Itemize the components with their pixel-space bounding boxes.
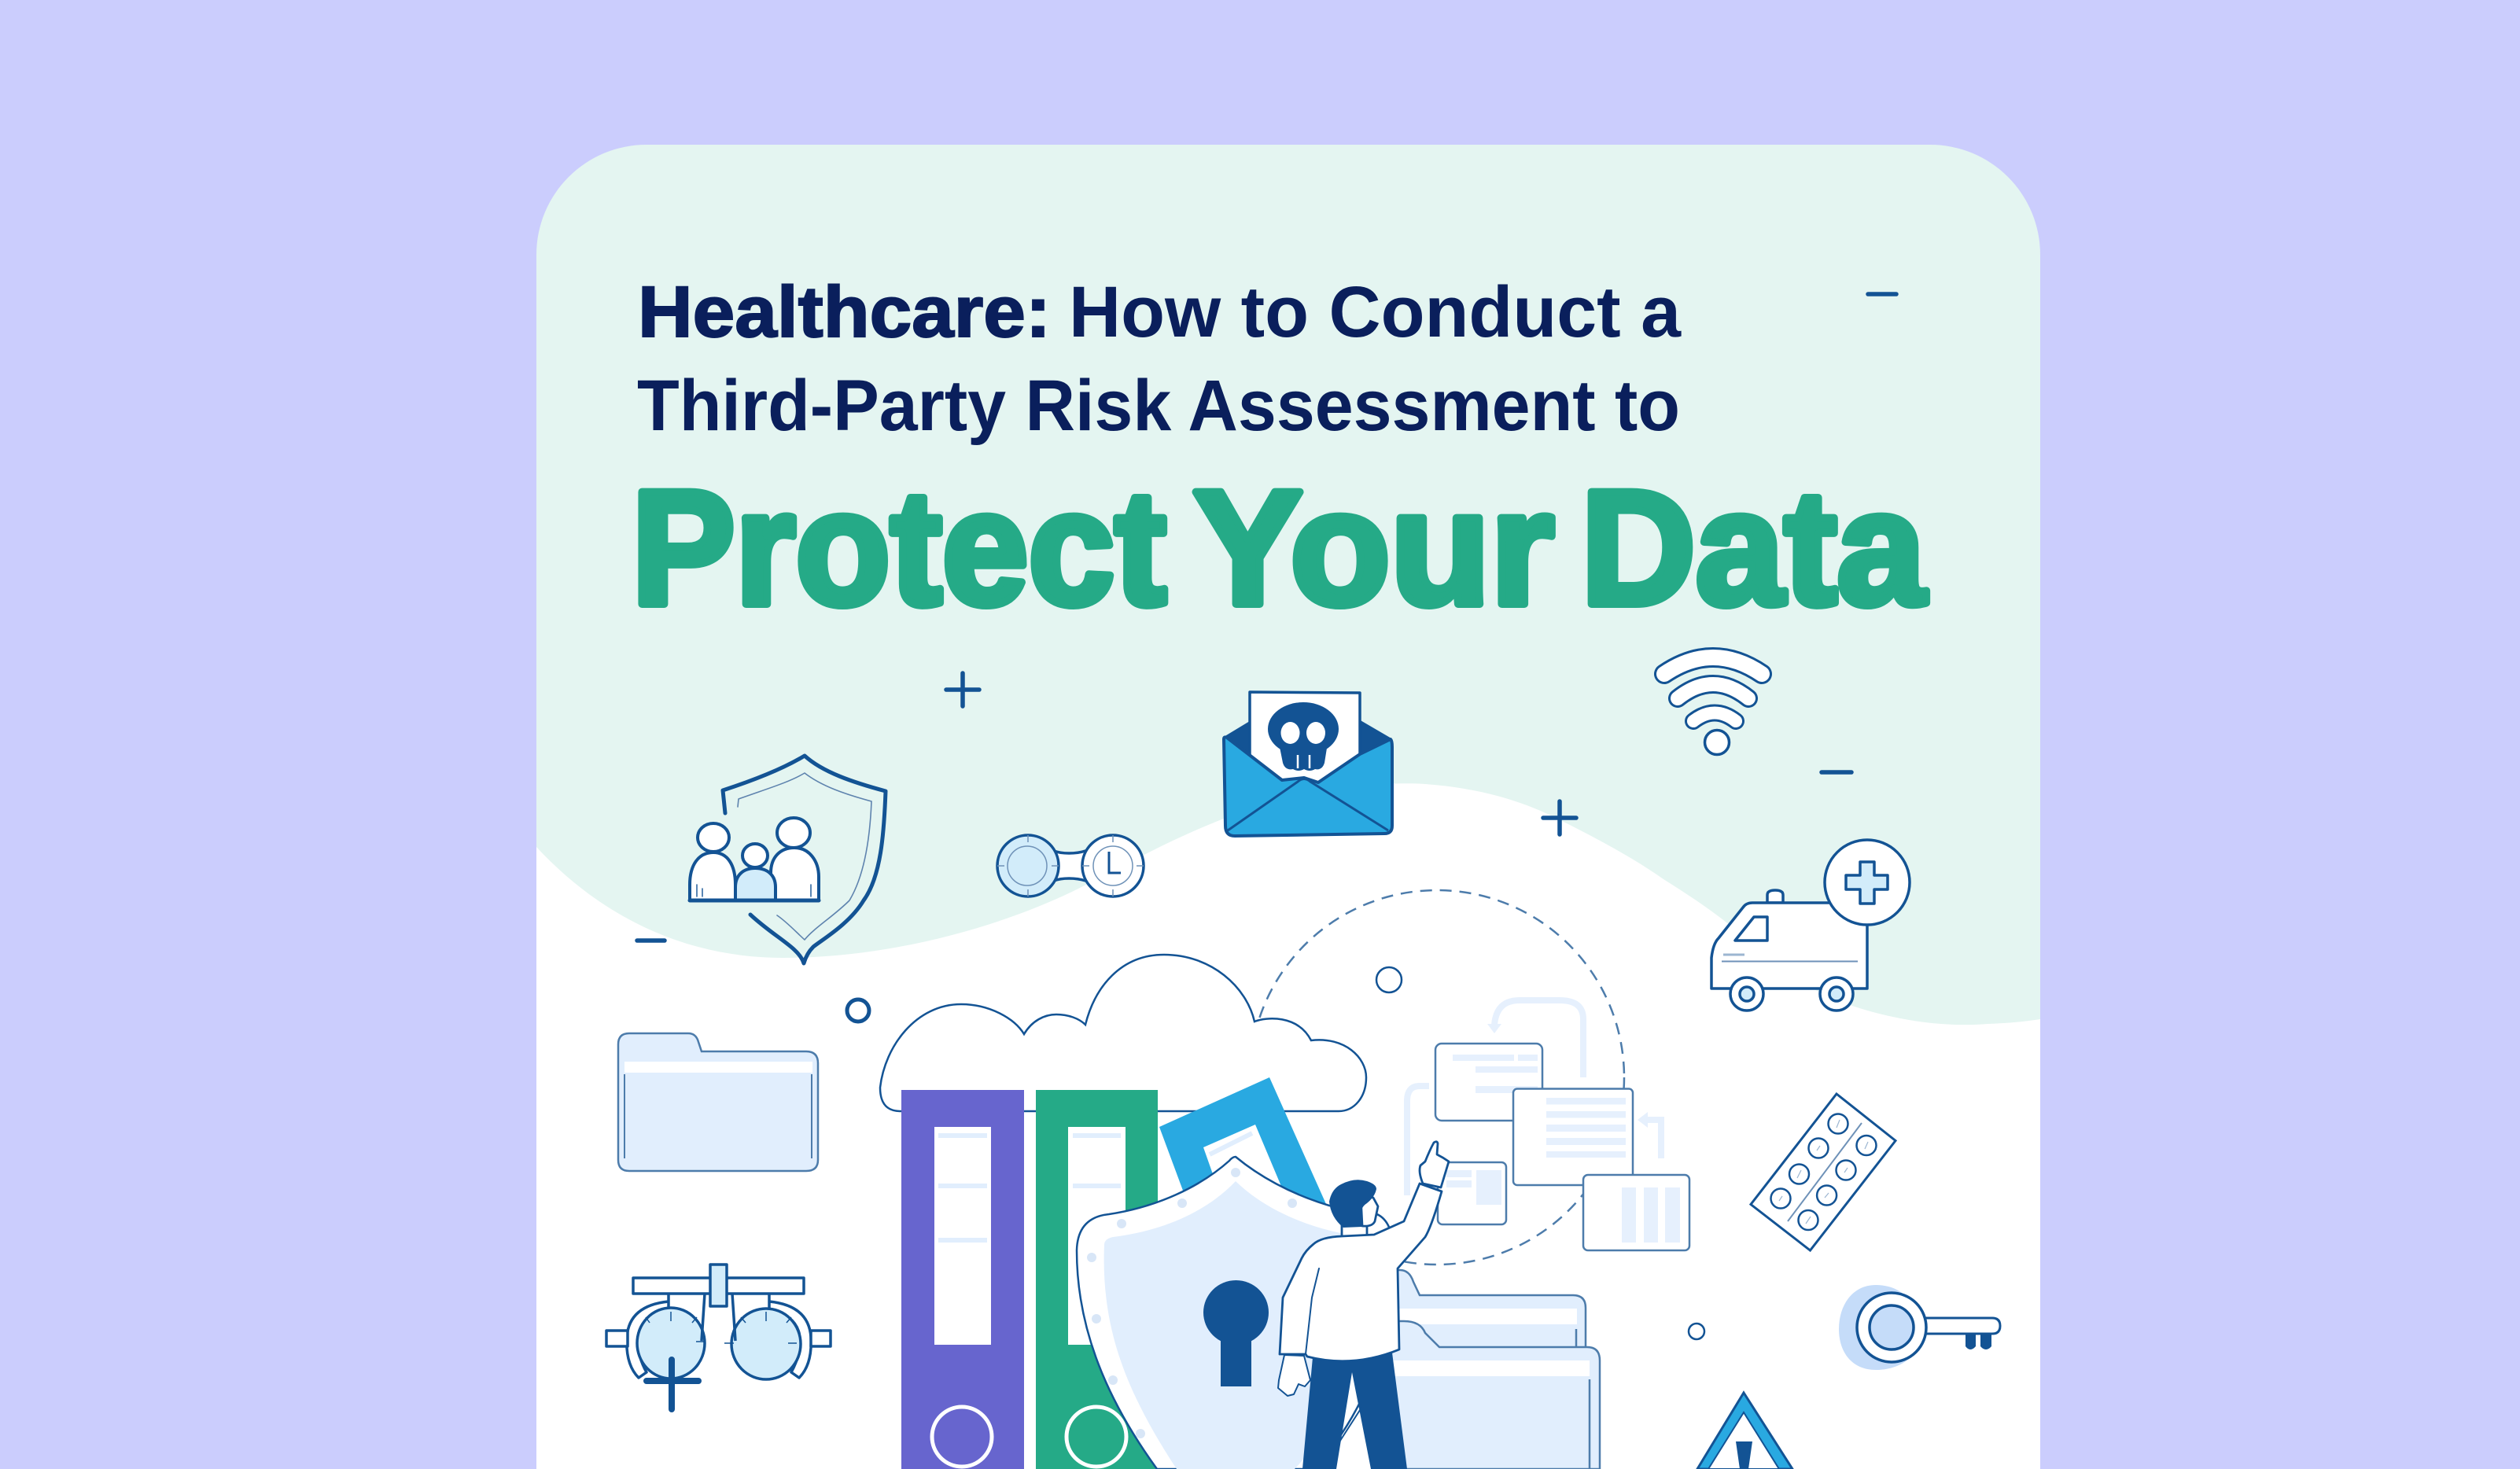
icon: phishing email with skull	[1224, 692, 1392, 836]
document cluster with arrows	[1407, 1000, 1689, 1250]
title	[632, 272, 1927, 639]
shield inner	[1104, 1181, 1365, 1469]
panel: card	[536, 145, 2040, 1469]
envelope back flap	[1225, 717, 1391, 794]
family figures	[690, 818, 819, 900]
key blob	[1839, 1285, 1921, 1370]
front folder	[1384, 1321, 1600, 1469]
window	[1735, 917, 1767, 941]
title line 2: Third-Party Risk Assessment to	[637, 366, 1680, 446]
coat	[1280, 1184, 1442, 1361]
letter	[1250, 692, 1360, 794]
white wave area	[536, 783, 2040, 1469]
slider	[710, 1265, 727, 1306]
lower hand	[1278, 1355, 1310, 1396]
title line 1	[638, 272, 1682, 352]
blue tilted binder	[1159, 1077, 1329, 1211]
icon: cloud	[880, 955, 1366, 1111]
title highlight: Protect Your Data: Your	[1193, 457, 1554, 639]
icon: warning triangle	[1697, 1393, 1792, 1469]
icon: family shield	[690, 756, 886, 963]
document 4	[1583, 1175, 1689, 1250]
dashed orbit circle	[1250, 890, 1624, 1265]
side stripes	[1722, 961, 1858, 963]
binders	[901, 1077, 1329, 1469]
title line 1: How to Conduct a	[1069, 272, 1682, 352]
right lens	[1082, 835, 1144, 896]
trousers	[1302, 1353, 1407, 1469]
large security shield	[1077, 1157, 1394, 1469]
document 1	[1435, 1044, 1542, 1121]
bridge lines	[702, 1294, 735, 1341]
title highlight: Protect Your Data: Protect	[632, 457, 1166, 639]
purple binder	[901, 1090, 1024, 1469]
lenses	[637, 1308, 705, 1379]
top bar	[633, 1278, 804, 1294]
shield rivets	[1087, 1168, 1297, 1438]
neck	[1342, 1224, 1367, 1236]
key shaft	[1923, 1318, 2000, 1334]
frame arcs	[627, 1294, 669, 1378]
key teeth	[1966, 1332, 1991, 1349]
title highlight: Protect Your Data	[632, 457, 1927, 639]
icon: key	[1839, 1285, 2000, 1370]
shield edge between legs	[1339, 1408, 1361, 1443]
icon: ambulance	[1711, 840, 1910, 1011]
green binder	[1036, 1090, 1158, 1469]
back folder	[1384, 1270, 1586, 1469]
hair	[1329, 1180, 1376, 1228]
decorative plus and minus signs	[637, 294, 1896, 941]
left lens	[997, 835, 1059, 896]
icon: eye trial frame	[606, 1265, 831, 1409]
icon: wifi signal	[1664, 657, 1762, 755]
icon: folder left	[618, 1033, 818, 1171]
vehicle body	[1711, 903, 1867, 989]
icon: pill blister pack	[1751, 1094, 1896, 1250]
envelope front	[1224, 737, 1392, 836]
medical cross badge	[1825, 840, 1910, 925]
face	[1361, 1195, 1378, 1226]
lens case connector	[1054, 851, 1085, 881]
skull	[1268, 702, 1339, 771]
document 2	[1513, 1088, 1633, 1185]
shield inner line	[738, 773, 871, 940]
title line 1: Healthcare:	[638, 272, 1051, 352]
wheels	[1730, 977, 1763, 1011]
document 3	[1438, 1162, 1506, 1224]
side tabs	[606, 1331, 628, 1346]
envelope front flap	[1228, 779, 1388, 830]
shield outline	[723, 756, 886, 963]
decorative rings	[847, 967, 1704, 1339]
keyhole	[1203, 1280, 1269, 1386]
large folders	[1384, 1270, 1600, 1469]
shield outer	[1077, 1157, 1394, 1469]
mint header area	[536, 145, 2040, 1025]
raised hand	[1420, 1142, 1449, 1187]
plus mark	[647, 1360, 698, 1409]
title highlight: Protect Your Data: Data	[1581, 457, 1927, 639]
flow arrows	[1407, 1000, 1661, 1195]
icon: contact lens case	[997, 835, 1144, 896]
key ring	[1857, 1293, 1926, 1362]
siren light	[1767, 890, 1783, 903]
person pointing at documents	[1278, 1142, 1449, 1469]
